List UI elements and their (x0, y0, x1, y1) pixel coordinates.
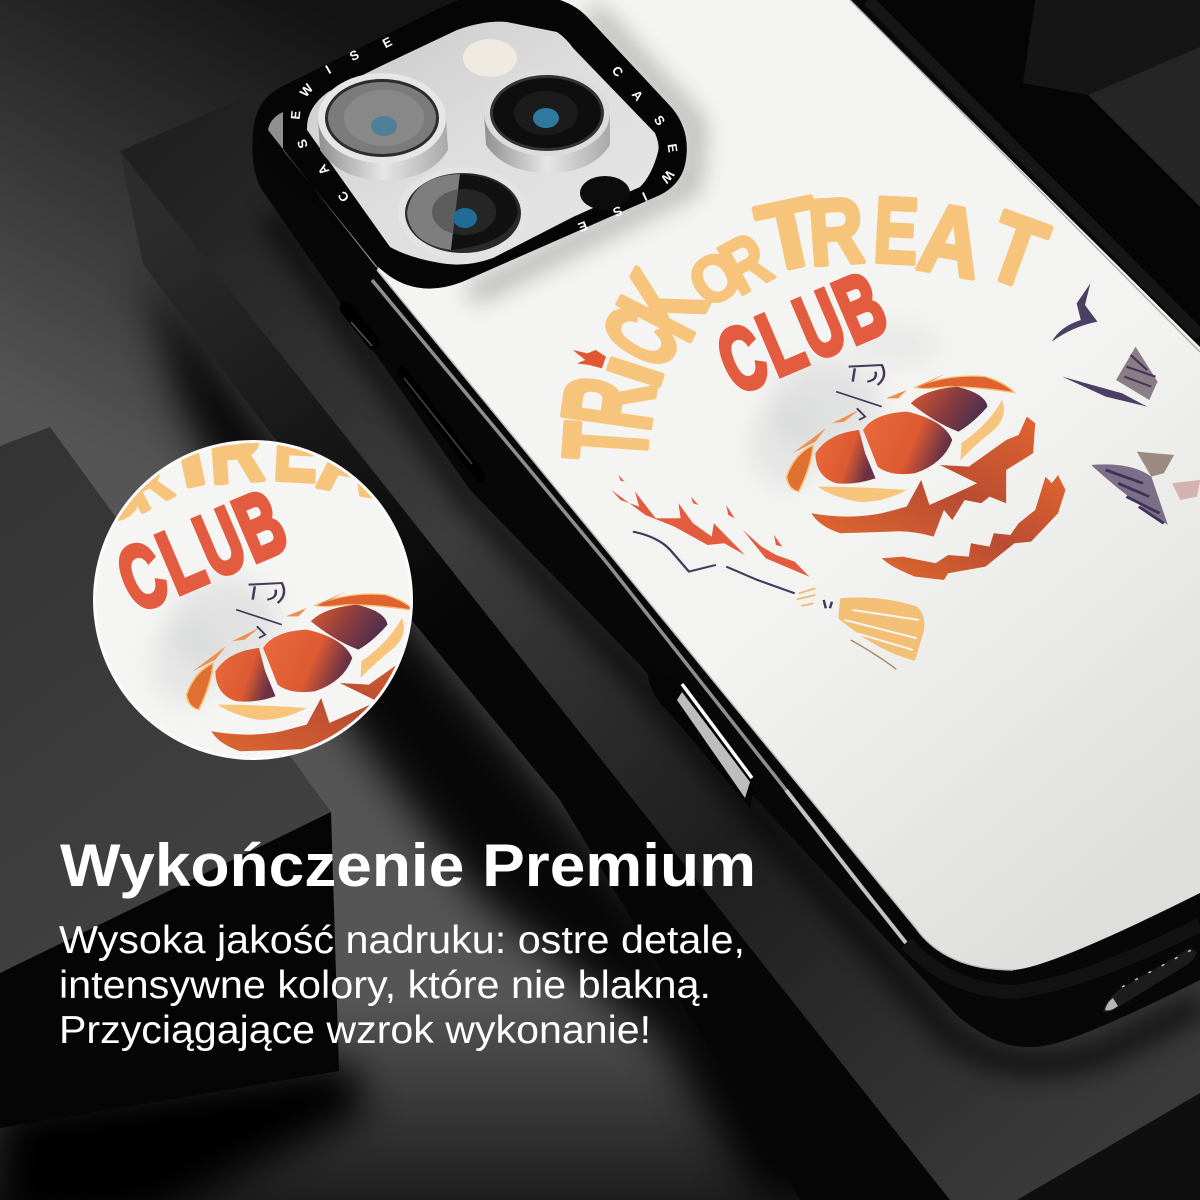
magnified detail circle: C (104, 522, 180, 631)
heading: TRICK OR TREAT: O (676, 236, 755, 322)
lens: bottom (398, 167, 528, 259)
camera island: clear glass with black Casewise ring (256, 0, 687, 289)
heading: TRICK OR TREAT: T (974, 192, 1059, 311)
phone drop shadow (270, 215, 1200, 1064)
heading: TRICK OR TREAT: T (538, 419, 673, 465)
microphone hole (580, 176, 630, 210)
lens: right (484, 70, 610, 173)
heading: TRICK OR TREAT: A (912, 183, 990, 300)
ring lettering: CASEWISE: E (380, 34, 395, 51)
magnified detail circle: R (205, 395, 267, 503)
top right black recess (860, 0, 1200, 350)
illustration: pumpkin, broom, bats (573, 283, 1200, 669)
heading: TRICK OR TREAT: T (749, 177, 829, 293)
heading: TRICK OR TREAT: R (707, 217, 784, 311)
magnified detail circle: R (107, 435, 184, 529)
magnified detail circle: L (145, 507, 218, 614)
ring lettering: CASEWISE: W (297, 80, 317, 100)
ring lettering: CASEWISE: S (651, 112, 668, 128)
heading: TRICK OR TREAT: E (871, 178, 921, 284)
bottom right black corner (1017, 1093, 1200, 1200)
floor darkening towards the bottom (0, 1000, 1000, 1200)
long block side face (120, 151, 950, 1200)
heading: CLUB: C (704, 304, 780, 413)
left low block top face (0, 427, 331, 973)
silver edge stripe (372, 280, 786, 790)
magnified detail circle: O (76, 454, 155, 540)
flash (463, 39, 517, 77)
clear gap between case and ring (268, 112, 380, 270)
magnified detail circle: E (271, 396, 321, 502)
port at the bottom (1103, 948, 1197, 1012)
ring lettering: CASEWISE: C (334, 188, 352, 205)
description text block: Przyciągające wzrok wykonanie! (59, 1009, 651, 1052)
heading: CLUB: B (821, 252, 900, 364)
glass window (307, 22, 659, 265)
ring lettering: CASEWISE: E (664, 143, 681, 154)
magnified detail circle: B (221, 470, 300, 582)
magnified detail circle: A (312, 401, 390, 518)
heading: TRICK OR TREAT: R (805, 177, 867, 285)
ring lettering: CASEWISE: S (294, 137, 311, 150)
magnified detail circle: T (149, 395, 229, 511)
description text block: intensywne kolory, które nie blakną. (59, 964, 711, 1007)
ring lettering: CASEWISE: E (288, 110, 303, 120)
magnified detail circle: U (182, 488, 258, 597)
ring lettering: CASEWISE: C (609, 63, 627, 80)
middle button (402, 372, 480, 476)
left low block front face (0, 812, 339, 1128)
top right wall (1023, 0, 1200, 95)
ring lettering: CASEWISE: A (629, 87, 647, 104)
ring lettering: CASEWISE (288, 34, 681, 235)
phone back: white printed surface (377, 0, 1200, 970)
heading: TRICK OR TREAT: R (537, 370, 682, 437)
top button (346, 308, 374, 344)
magnified detail circle (93, 440, 413, 760)
right edge of the case (868, 0, 1200, 335)
case lip around the back (906, 925, 1200, 992)
heading: Wykończenie Premium: Wykończenie Premium (60, 832, 756, 899)
heading: CLUB: U (782, 270, 858, 379)
ring lettering: CASEWISE: I (640, 189, 650, 204)
ring lettering: CASEWISE: E (576, 218, 590, 235)
heading: TRICK OR TREAT: C (581, 291, 701, 384)
ring lettering: CASEWISE: A (314, 161, 332, 178)
heading: TRICK OR TREAT (537, 177, 1059, 465)
ring lettering: CASEWISE: S (610, 203, 625, 220)
phone: black glossy case (252, 0, 1200, 1047)
chrome side button (648, 668, 756, 808)
smoke (770, 360, 880, 450)
lens: left (318, 73, 448, 180)
top right block top face (1088, 47, 1200, 207)
soft shadow below left block (0, 1060, 370, 1200)
ring lettering: CASEWISE: W (657, 167, 677, 187)
description text block (59, 919, 745, 1052)
heading: CLUB: L (745, 289, 818, 396)
heading: TRICK OR TREAT: K (595, 254, 732, 357)
ring lettering: CASEWISE: S (347, 47, 362, 64)
printed artwork: Trick or Treat Club (537, 177, 1200, 669)
description text block: Wysoka jakość nadruku: ostre detale, (59, 919, 745, 962)
heading: CLUB (704, 252, 900, 413)
ring lettering: CASEWISE: I (323, 62, 334, 77)
heading: TRICK OR TREAT: I (590, 348, 680, 396)
soft shadow under long block (143, 264, 860, 1200)
